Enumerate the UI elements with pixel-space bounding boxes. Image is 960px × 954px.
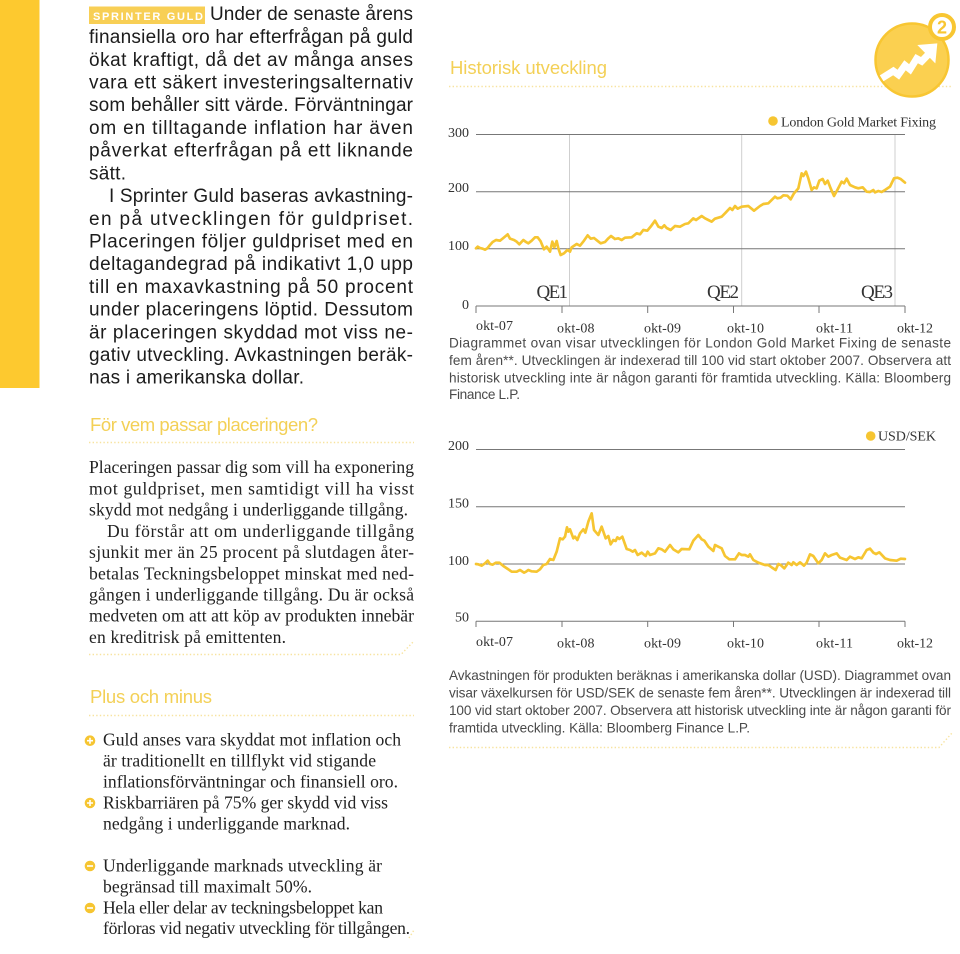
list: plus points <box>85 730 401 833</box>
intro text block <box>89 4 414 389</box>
intro text block: till en maxavkastning på 50 procent <box>89 277 414 298</box>
text block: target group: betalas Teckningsbeloppet minskat med ned- <box>89 563 414 583</box>
axis labels: okt-07 <box>476 319 513 334</box>
QE labels: QE3 <box>861 282 893 303</box>
axis labels: okt-09 <box>644 322 681 336</box>
axis labels: 200 <box>448 181 469 196</box>
badge: Sprinter Guld: SPRINTER GULD <box>93 11 203 23</box>
text block: target group <box>89 457 414 647</box>
text block: target group: sjunkit mer än 25 procent på slutdagen åter- <box>89 542 414 562</box>
axis labels: okt-11 <box>816 636 853 651</box>
icon: minus bullet <box>85 861 95 871</box>
list: plus points: Riskbarriären på 75% ger skydd vid viss <box>103 792 388 812</box>
yellow side band <box>0 0 40 388</box>
intro text block: ökat kraftigt, då det av många anses <box>89 50 413 71</box>
axis labels: 200 <box>448 439 469 454</box>
axis labels: okt-12 <box>897 636 933 651</box>
intro text block: gativ utveckling. Avkastningen beräk- <box>89 345 413 366</box>
caption: USD/SEK chart: framtida utveckling. Källa: Bloomberg Finance L.P. <box>449 721 750 736</box>
icon: minus bullet <box>85 903 95 913</box>
text block: target group: Du förstår att om underliggande tillgång <box>107 521 414 541</box>
axis labels: 100 <box>448 239 469 254</box>
caption: gold chart: Finance L.P. <box>449 387 520 402</box>
chart: USD/SEK <box>448 430 936 651</box>
intro text block: som behåller sitt värde. Förväntningar <box>89 95 414 116</box>
axis labels <box>448 126 933 336</box>
axis labels: okt-08 <box>557 636 594 651</box>
intro text block: Placeringen följer guldpriset med en <box>89 232 413 252</box>
text block: target group: Placeringen passar dig som vill ha exponering <box>89 457 414 477</box>
list: plus points: är traditionellt en tillflykt vid stigande <box>103 751 376 771</box>
caption: gold chart: Diagrammet ovan visar utvecklingen för London Gold Market Fixing de senaste <box>449 336 951 351</box>
gold line <box>476 172 905 255</box>
intro text block: en på utvecklingen för guldpriset. <box>89 209 413 230</box>
axis labels: okt-12 <box>897 322 933 336</box>
legend: London Gold Market Fixing <box>781 116 936 130</box>
axis labels: okt-07 <box>476 635 513 650</box>
axis labels: 0 <box>462 298 469 313</box>
caption: USD/SEK chart: Avkastningen för produkten beräknas i amerikanska dollar (USD). Diagrammet ovan <box>449 668 951 683</box>
axis labels: okt-09 <box>644 636 681 651</box>
caption: gold chart: fem åren**. Utvecklingen är indexerad till 100 vid start oktober 2007. Observera att <box>449 353 951 368</box>
caption: gold chart <box>449 336 951 402</box>
intro text block: under placeringens löptid. Dessutom <box>89 300 413 320</box>
axis labels <box>448 439 933 651</box>
caption: USD/SEK chart: 100 vid start oktober 2007. Observera att historisk utveckling inte är någon garanti för <box>449 703 951 718</box>
caption: USD/SEK chart: visar växelkursen för USD/SEK de senaste fem åren**. Utvecklingen är indexerad till <box>449 685 951 700</box>
gold line <box>476 513 905 573</box>
text block: target group: medveten om att att köp av produkten innebär <box>89 606 414 626</box>
badge: Sprinter Guld <box>89 6 205 24</box>
intro text block: Under de senaste årens <box>210 4 413 25</box>
intro text block: är placeringen skyddad mot viss ne- <box>89 322 413 343</box>
intro text block: vara ett säkert investeringsalternativ <box>89 72 414 94</box>
text block: target group: gången i underliggande tillgång. Du är också <box>89 584 414 604</box>
icon: plus bullet <box>85 735 95 746</box>
intro text block: deltagandegrad på indikativt 1,0 upp <box>89 254 413 275</box>
axis labels: 100 <box>448 554 469 569</box>
list: minus points <box>85 856 410 938</box>
list: plus points: inflationsförväntningar och finansiell oro. <box>103 772 398 792</box>
axis labels: 150 <box>448 497 469 512</box>
text block: target group: en kreditrisk på emittenten. <box>89 627 286 647</box>
list: plus points: nedgång i underliggande marknad. <box>103 813 350 833</box>
QE labels <box>536 282 893 303</box>
intro text block: nas i amerikanska dollar. <box>89 368 304 389</box>
axis labels: okt-08 <box>557 322 594 336</box>
list: minus points: Hela eller delar av teckningsbeloppet kan <box>103 897 383 917</box>
icon: growth arrow badge <box>876 15 954 96</box>
QE labels: QE2 <box>707 282 739 303</box>
text block: target group: mot guldpriset, men samtidigt vill ha visst <box>89 478 414 498</box>
axis labels: 300 <box>448 126 469 141</box>
caption: gold chart: historisk utveckling inte är någon garanti för framtida utveckling. Källa: Bloomberg <box>449 370 951 385</box>
axis labels: okt-10 <box>727 636 764 651</box>
heading: Plus och minus: Plus och minus <box>90 686 212 707</box>
heading: Historisk utveckling: Historisk utveckling <box>450 57 607 78</box>
list: plus points: Guld anses vara skyddat mot inflation och <box>103 730 401 750</box>
list: minus points: förloras vid negativ utveckling för tillgången. <box>103 918 410 938</box>
axis labels: okt-11 <box>816 322 853 336</box>
icon: plus bullet <box>85 798 95 808</box>
intro text block: sätt. <box>89 163 126 184</box>
caption: USD/SEK chart <box>449 668 951 736</box>
QE labels: QE1 <box>536 282 568 303</box>
list: minus points: Underliggande marknads utveckling är <box>103 856 382 876</box>
intro text block: om en tilltagande inflation har även <box>89 118 413 139</box>
intro text block: påverkat efterfrågan på ett liknande <box>89 141 413 162</box>
axis labels: okt-10 <box>727 322 764 336</box>
text block: target group: skydd mot nedgång i underliggande tillgång. <box>89 500 408 520</box>
icon: growth arrow badge: 2 <box>937 18 947 38</box>
list: minus points: begränsad till maximalt 50%. <box>103 876 312 896</box>
legend: USD/SEK <box>878 430 936 444</box>
intro text block: I Sprinter Guld baseras avkastning- <box>109 186 413 207</box>
chart: London Gold Market Fixing <box>448 116 936 336</box>
axis labels: 50 <box>455 611 469 626</box>
heading: För vem passar placeringen: För vem passar placeringen? <box>90 414 318 435</box>
intro text block: finansiella oro har efterfrågan på guld <box>89 27 413 48</box>
